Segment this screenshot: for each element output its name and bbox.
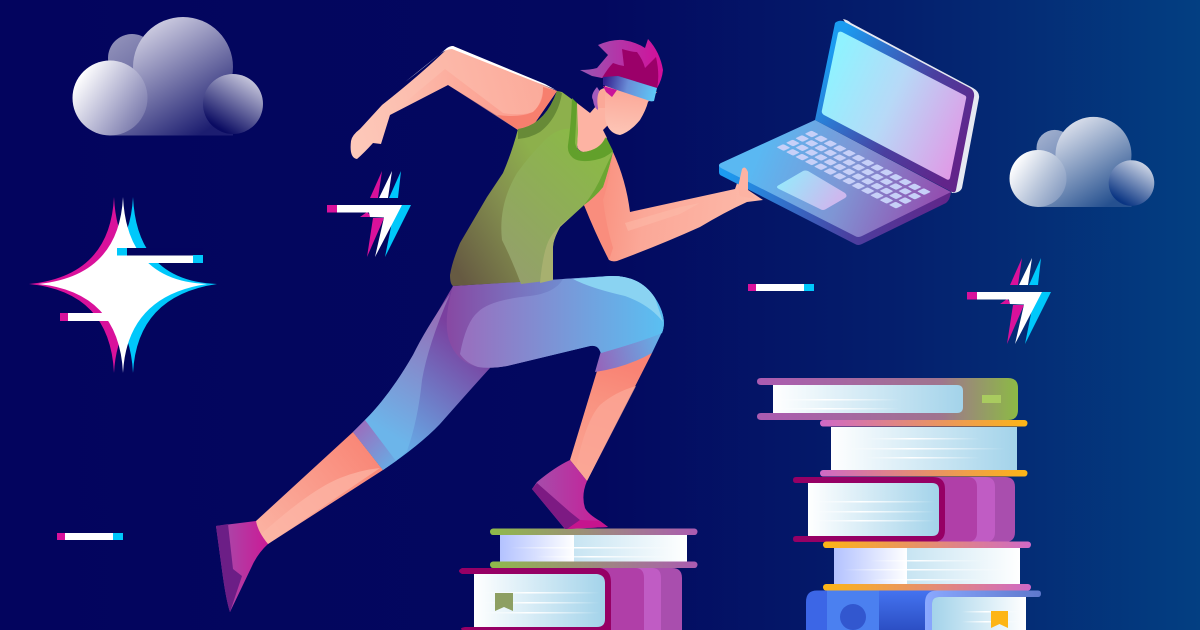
lightning bolt: left (327, 171, 411, 257)
back leg (254, 432, 383, 544)
cloud: top right (1010, 117, 1154, 207)
book stack: center (459, 528, 698, 630)
glitch dash: bottom left (57, 533, 123, 540)
bookmark (991, 611, 1008, 628)
glitch dash: middle (748, 284, 814, 291)
hair (580, 39, 663, 88)
headband (603, 76, 657, 101)
book: purple (793, 477, 1015, 542)
laptop: base top (719, 120, 951, 237)
book: pink-orange (823, 542, 1031, 590)
front shoe (532, 460, 608, 529)
back arm (351, 46, 557, 159)
front leg (570, 353, 652, 481)
book: lower purple (459, 568, 682, 630)
laptop (719, 19, 979, 245)
laptop: base side (719, 165, 951, 245)
glitch bar: upper (117, 248, 203, 263)
neck and ear (577, 87, 614, 152)
shorts: calf (353, 286, 490, 470)
shorts: thigh (447, 276, 664, 368)
sparkle star with glitch offset (29, 197, 217, 373)
shirt: neckline band (568, 98, 613, 161)
glitch bar: lower (60, 313, 110, 321)
lightning bolt: right (967, 258, 1051, 344)
laptop: keyboard (774, 129, 933, 210)
book: green (757, 378, 1018, 420)
book: orange-pink (820, 420, 1028, 476)
runner (216, 39, 763, 612)
back shoe (216, 521, 268, 612)
front arm (584, 152, 763, 261)
book: upper green (490, 528, 698, 568)
laptop: screen (822, 32, 966, 180)
face (605, 84, 657, 135)
bookmark (495, 593, 513, 611)
shorts: knee bands (353, 420, 396, 470)
book stack: right (757, 378, 1041, 630)
shirt: shoulder strap (518, 91, 562, 139)
laptop: back edge (843, 19, 979, 193)
cloud: top left (72, 17, 263, 136)
shorts (353, 276, 664, 470)
laptop: trackpad (777, 170, 846, 210)
shirt (450, 91, 613, 286)
laptop: fingers (738, 168, 755, 199)
eye shadow (603, 86, 617, 97)
laptop: lid (815, 21, 974, 192)
book: blue (806, 590, 1041, 630)
